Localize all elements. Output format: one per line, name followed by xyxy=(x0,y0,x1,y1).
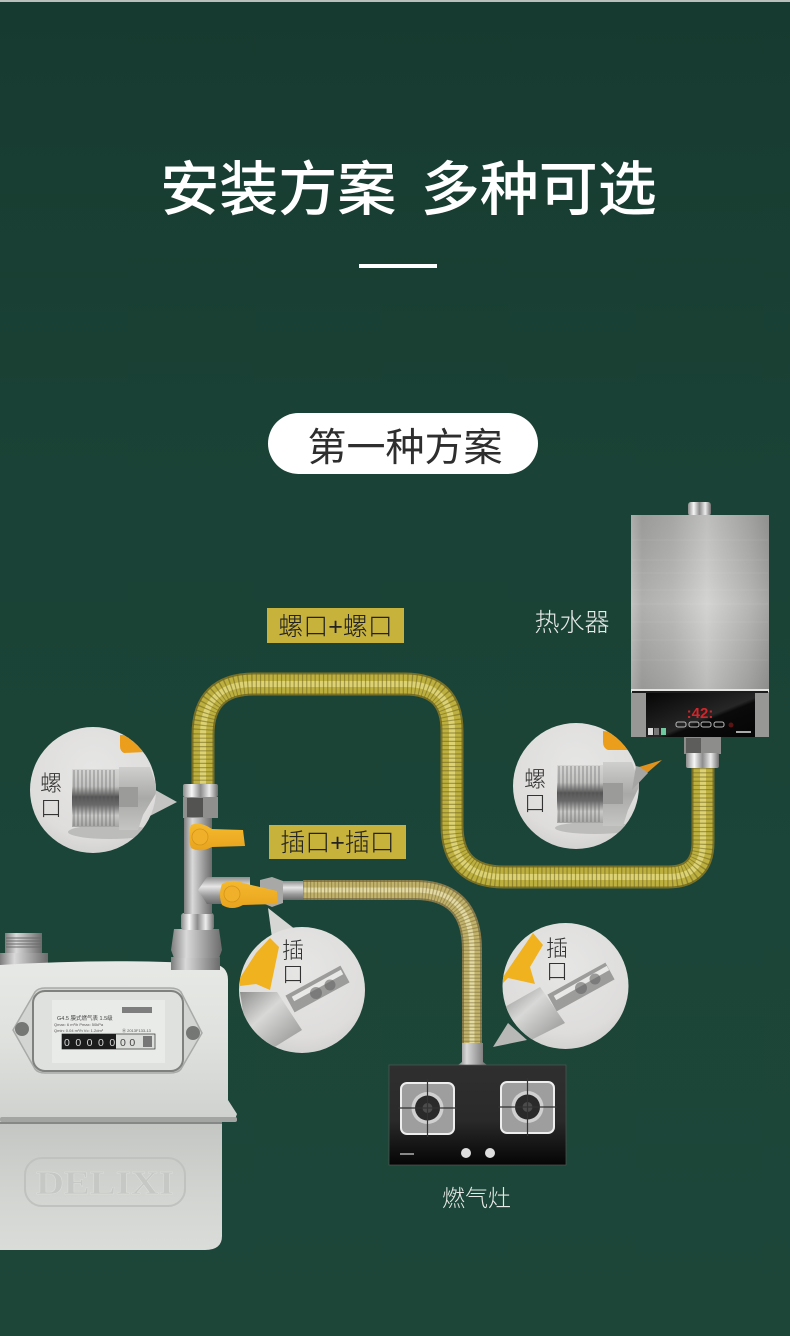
meter logo: DELIXI xyxy=(36,1165,174,1202)
label: screw + screw: 螺口+螺口 xyxy=(278,613,393,641)
water heater: :42: xyxy=(687,705,713,722)
gas meter xyxy=(0,933,237,1250)
stove xyxy=(389,1043,566,1165)
callout: socket fitting at stove xyxy=(493,923,628,1049)
right burner xyxy=(498,1078,557,1136)
pill heading: first option: 第一种方案 xyxy=(307,427,503,470)
callout: socket fitting at valve xyxy=(239,908,365,1053)
meter display plate: Ⓜ 2013F133-13 xyxy=(122,1027,152,1033)
water heater xyxy=(631,502,769,737)
counter: 00 xyxy=(120,1037,139,1049)
callout: screw fitting at valve: 螺 xyxy=(40,771,62,796)
callout: socket fitting at valve: 口 xyxy=(282,962,304,987)
pill heading: first option xyxy=(268,413,538,474)
callout: screw fitting at heater: 螺 xyxy=(524,767,546,792)
callout: screw fitting at valve: 口 xyxy=(40,796,62,821)
meter inlet fitting xyxy=(0,933,48,965)
meter body xyxy=(0,1122,222,1250)
callout: socket fitting at stove: 口 xyxy=(546,959,568,984)
title underline xyxy=(359,264,437,268)
label: water heater: 热水器 xyxy=(534,609,610,637)
meter display plate: G4.5 膜式燃气表 1.5级 xyxy=(57,1014,113,1022)
stove knobs xyxy=(461,1148,495,1158)
left burner xyxy=(398,1079,457,1137)
label: gas stove: 燃气灶 xyxy=(442,1185,511,1211)
title: 安装方案 多种可选 xyxy=(160,157,657,223)
meter logo xyxy=(25,1158,185,1206)
upper valve handle xyxy=(189,824,245,850)
meter display plate xyxy=(13,988,202,1073)
meter display plate: Qmin: 0.04 m³/h Vc: 1.2dm³ xyxy=(54,1028,104,1033)
meter display plate: Qmax: 6 m³/h Pmax: 50kPa xyxy=(54,1022,104,1027)
label: screw + screw xyxy=(267,608,404,643)
label: socket + socket: 插口+插口 xyxy=(280,829,395,857)
callout: screw fitting at heater xyxy=(513,723,662,849)
water heater connector nut xyxy=(684,737,721,768)
counter: 00000 xyxy=(64,1037,121,1049)
callout: screw fitting at heater: 口 xyxy=(524,791,546,816)
branch valve xyxy=(198,877,250,904)
tee valve assembly xyxy=(171,784,303,970)
callout: socket fitting at valve: 插 xyxy=(282,938,304,963)
socket hose: valve to stove xyxy=(303,890,472,1044)
callout: screw fitting at valve xyxy=(30,727,177,853)
callout: socket fitting at stove: 插 xyxy=(546,936,568,961)
branch valve handle xyxy=(220,881,278,908)
label: socket + socket xyxy=(269,825,406,859)
threaded hose: valve to water heater xyxy=(203,684,703,877)
counter xyxy=(62,1034,155,1049)
